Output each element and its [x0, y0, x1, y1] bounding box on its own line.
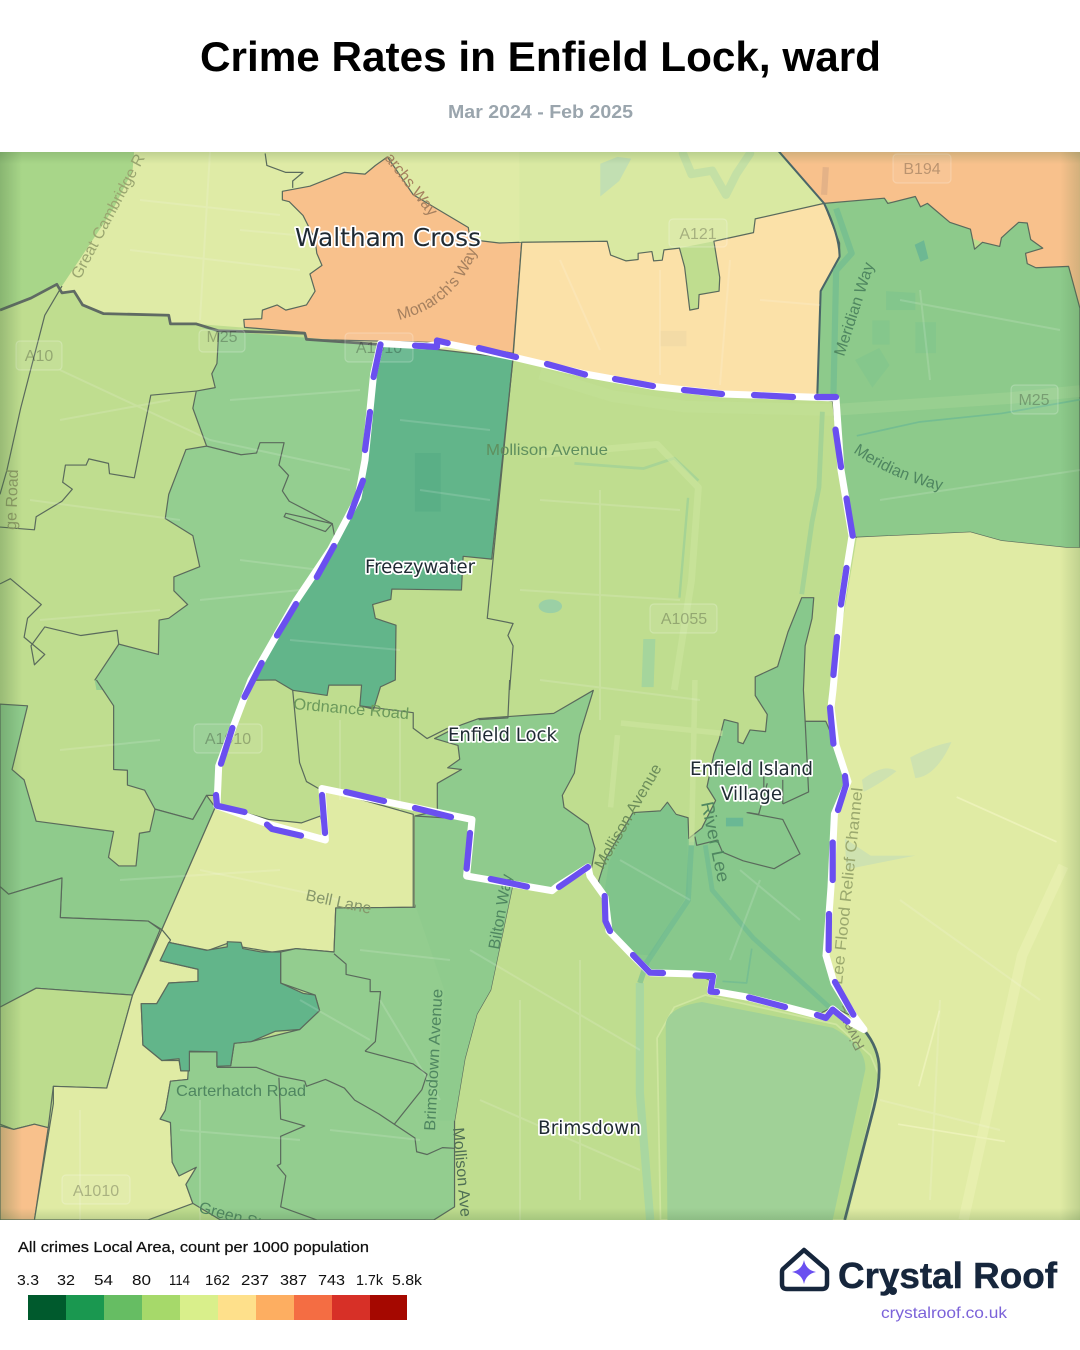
place name labels: Village: [721, 783, 782, 805]
road name labels: River Lee: [697, 800, 734, 884]
map regions: south-east: [599, 532, 1080, 1220]
road name labels: Mollison Avenue: [592, 761, 666, 872]
road number shields: M25: [206, 329, 238, 346]
logo: Crystal Roof: [782, 1250, 1058, 1322]
legend values: 32: [57, 1272, 75, 1289]
place name labels: Brimsdown: [538, 1117, 641, 1139]
road number shields: A1010: [205, 731, 251, 748]
road name labels: Ordnance Road: [293, 696, 410, 723]
place name labels: Freezywater: [365, 556, 475, 578]
map regions: north-east: [513, 150, 1080, 690]
legend values: 3.3: [17, 1272, 39, 1289]
ward boundary: white line: [217, 344, 864, 1030]
map regions: south-west: [0, 680, 595, 1220]
road name labels: Meridian Way: [854, 444, 944, 492]
legend values: 162: [205, 1272, 230, 1289]
road number shields: A1055: [661, 611, 707, 628]
road name labels: Monarch's Way: [397, 248, 478, 320]
place name labels: Enfield Island: [690, 758, 813, 780]
road number shields: A1010: [356, 340, 402, 357]
road name labels: River L: [831, 1003, 869, 1053]
map regions: north-west: [0, 150, 530, 709]
road number shields: A1010: [73, 1183, 119, 1200]
icon: keyhole descender on the y: [889, 1287, 897, 1295]
legend values: 114: [169, 1272, 190, 1289]
road name labels: Meridian Way: [832, 261, 878, 358]
road name labels: Brimsdown Avenue: [422, 988, 446, 1131]
legend colour scale: [28, 1295, 407, 1320]
map road grid: [30, 152, 1080, 1220]
legend values: 5.8k: [392, 1272, 423, 1289]
road name labels: Carterhatch Road: [176, 1083, 306, 1100]
road name labels: Lee Flood Relief Channel: [829, 787, 867, 985]
road name labels: ge Road: [3, 469, 22, 530]
date range subtitle: Mar 2024 - Feb 2025: [448, 102, 633, 122]
icon: house with star: [782, 1250, 827, 1289]
legend values: 743: [318, 1272, 345, 1289]
road name labels: [6, 154, 944, 1272]
road number shields: M25: [1018, 392, 1050, 409]
road name labels: Mollison Ave: [449, 1127, 474, 1218]
road name labels: Green St: [197, 1199, 264, 1233]
legend values: 1.7k: [356, 1272, 383, 1289]
legend values: 387: [280, 1272, 307, 1289]
legend values: 237: [241, 1272, 269, 1289]
road number shields: A121: [679, 226, 717, 243]
road name labels: Bilton Way: [486, 873, 516, 951]
legend values: [17, 1272, 423, 1289]
road number shields: A10: [25, 348, 53, 365]
road name labels: archs Way: [381, 150, 440, 220]
place name labels: Waltham Cross: [295, 223, 481, 252]
legend values: 80: [132, 1272, 151, 1289]
place name labels: Enfield Lock: [448, 724, 557, 746]
place name labels: [295, 223, 813, 1139]
title: Crime Rates in Enfield Lock, ward: [200, 33, 881, 80]
website: crystalroof.co.uk: [881, 1305, 1008, 1322]
wordmark: Crystal Roof: [838, 1255, 1058, 1296]
road name labels: Mollison Avenue: [486, 442, 608, 459]
legend: [17, 1239, 423, 1320]
road name labels: Bell Lane: [304, 887, 373, 918]
legend values: 54: [94, 1272, 113, 1289]
road number shields: B194: [903, 161, 941, 178]
legend title: All crimes Local Area, count per 1000 population: [18, 1239, 369, 1256]
road name labels: Great Cambridge R: [69, 151, 149, 282]
ward boundary: purple dashes: [216, 340, 853, 1022]
road number shields: [16, 154, 1058, 1204]
